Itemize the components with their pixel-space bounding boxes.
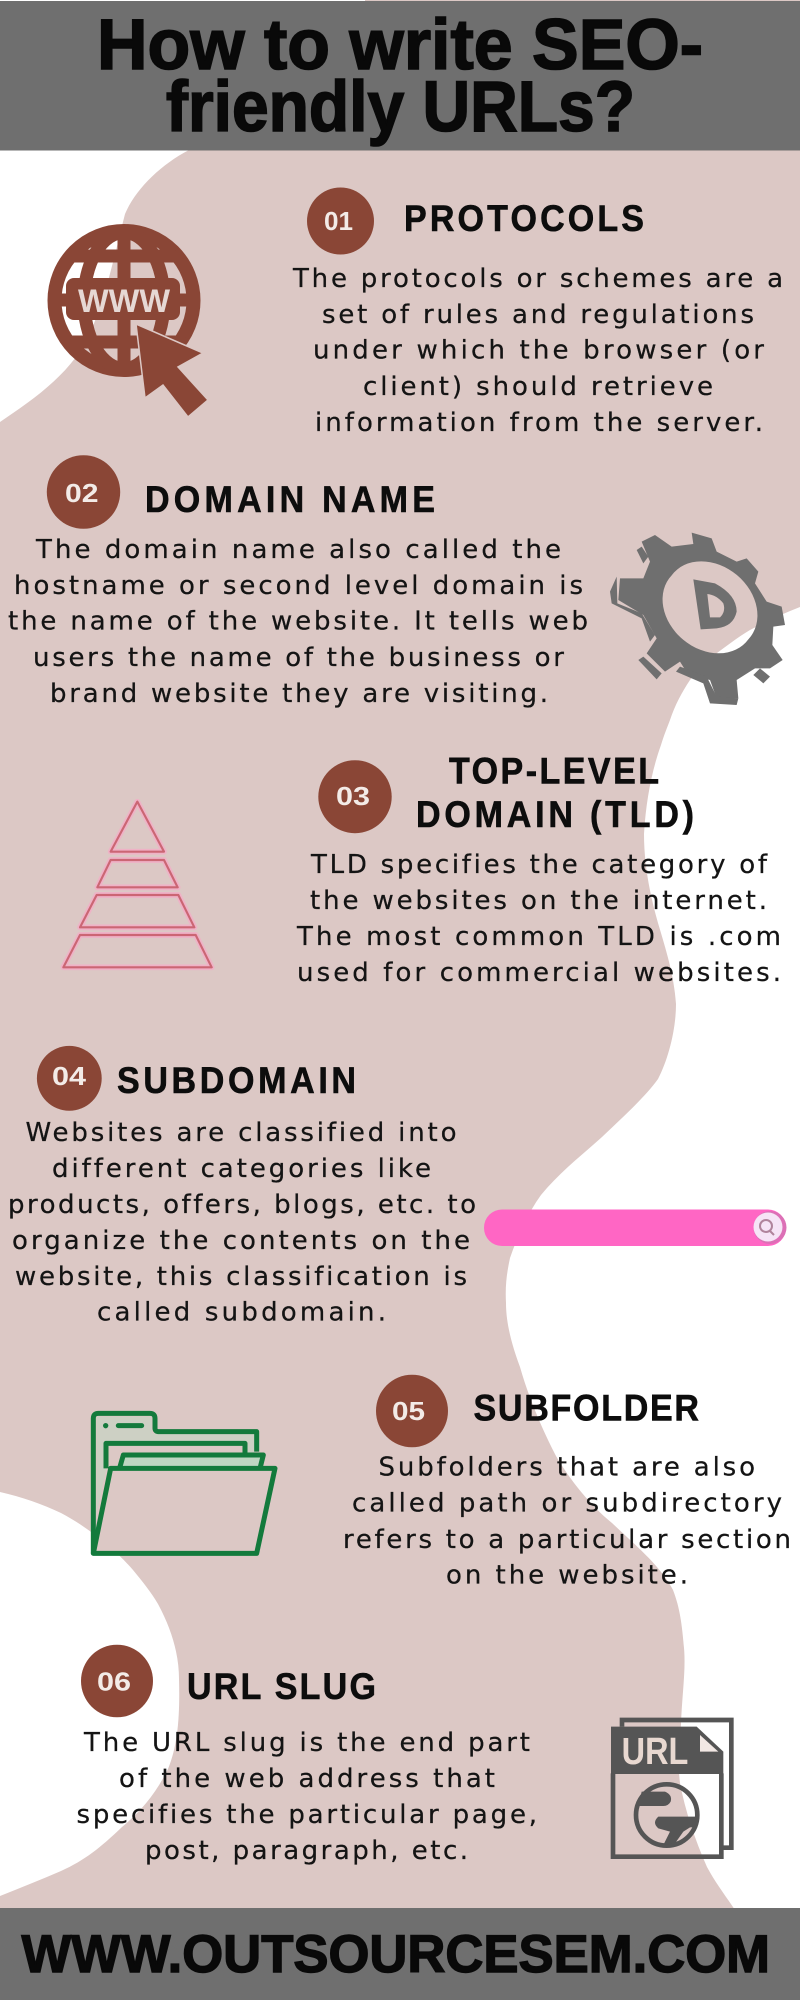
panel: url slug — [76, 1645, 731, 1866]
number badge 01 — [307, 188, 374, 254]
text block: domain name: users the name of the business or — [33, 643, 564, 673]
panel: top-level domain — [63, 750, 781, 988]
text block: url slug — [76, 1728, 537, 1866]
text block: subdomain: called subdomain. — [97, 1298, 386, 1328]
text block: url slug: The URL slug is the end part — [83, 1728, 530, 1758]
text block: url slug: of the web address that — [119, 1764, 495, 1794]
text block: domain name: hostname or second level domain is — [14, 571, 583, 601]
number badge 01: 01 — [324, 206, 353, 236]
text block: domain name: The domain name also called the — [35, 535, 561, 565]
icon: url file: URL — [622, 1731, 688, 1773]
text block: top-level domain — [296, 850, 781, 988]
panel: protocols — [40, 188, 783, 438]
icon: pyramid — [63, 802, 212, 967]
number badge 05 — [376, 1375, 448, 1447]
number badge 05: 05 — [392, 1396, 425, 1426]
text block: protocols: information from the server. — [315, 408, 763, 438]
icon: url file — [611, 1720, 731, 1857]
number badge 03 — [318, 760, 392, 833]
icon: gear with letter D — [610, 533, 785, 705]
text block: subfolder: Subfolders that are also — [378, 1452, 755, 1482]
title: friendly URLs? — [166, 68, 635, 147]
number badge 04 — [37, 1046, 102, 1111]
text block: subdomain: Websites are classified into — [26, 1118, 456, 1148]
title: How to write SEO- — [97, 6, 703, 85]
text block: url slug: post, paragraph, etc. — [145, 1836, 468, 1866]
heading: top-level domain: TOP-LEVEL — [449, 750, 659, 792]
footer url: WWW.OUTSOURCESEM.COM — [22, 1925, 770, 1984]
text block: top-level domain: The most common TLD is .com — [296, 922, 781, 952]
heading: top-level domain — [416, 750, 694, 835]
heading: domain name: DOMAIN NAME — [145, 479, 435, 520]
icon: www globe with cursor — [40, 225, 210, 417]
icon: folder — [93, 1413, 275, 1553]
heading: url slug: URL SLUG — [187, 1666, 376, 1707]
panel: subfolder — [93, 1375, 791, 1590]
number badge 06: 06 — [97, 1667, 131, 1697]
heading: subfolder: SUBFOLDER — [474, 1387, 699, 1429]
panel: domain name — [8, 455, 785, 709]
text block: domain name: brand website they are visiting. — [50, 679, 548, 709]
number badge 02: 02 — [65, 478, 98, 508]
panel: subdomain — [8, 1046, 786, 1328]
text block: protocols: under which the browser (or — [313, 336, 764, 366]
heading: protocols: PROTOCOLS — [404, 198, 644, 239]
text block: protocols: set of rules and regulations — [322, 300, 754, 330]
text block: domain name: the name of the website. It tells web — [8, 606, 588, 636]
text block: protocols: The protocols or schemes are a — [292, 264, 783, 294]
heading: subdomain: SUBDOMAIN — [117, 1060, 356, 1101]
text block: protocols: client) should retrieve — [363, 372, 713, 402]
header band — [0, 1, 800, 150]
text block: subfolder: on the website. — [446, 1560, 688, 1590]
text block: subfolder: called path or subdirectory — [352, 1489, 782, 1519]
text block: subdomain: organize the contents on the — [12, 1226, 470, 1256]
number badge 03: 03 — [336, 781, 370, 811]
icon: search bar — [484, 1210, 786, 1246]
footer band — [0, 1908, 800, 2000]
text block: top-level domain: TLD specifies the category of — [310, 850, 768, 880]
text block: protocols — [292, 264, 783, 438]
heading: top-level domain: DOMAIN (TLD) — [416, 794, 694, 835]
text block: subfolder — [343, 1452, 791, 1590]
text block: subdomain — [8, 1118, 476, 1328]
text block: domain name — [8, 535, 588, 709]
text block: url slug: specifies the particular page, — [76, 1800, 537, 1830]
number badge 06 — [81, 1645, 153, 1717]
number badge 02 — [47, 455, 120, 529]
text block: top-level domain: used for commercial websites. — [297, 958, 781, 988]
text block: subdomain: different categories like — [52, 1154, 431, 1184]
text block: top-level domain: the websites on the internet. — [310, 886, 767, 916]
number badge 04: 04 — [52, 1061, 87, 1091]
text block: subfolder: refers to a particular section — [343, 1525, 791, 1555]
text block: subdomain: products, offers, blogs, etc. to — [8, 1190, 476, 1220]
title — [97, 6, 703, 147]
text block: subdomain: website, this classification is — [15, 1262, 467, 1292]
icon: www globe with cursor: WWW — [78, 283, 171, 319]
